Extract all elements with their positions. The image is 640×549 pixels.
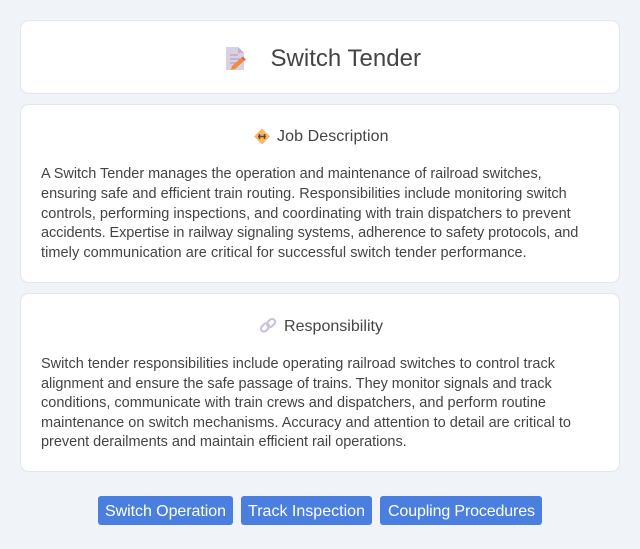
icon: railroad diamond sign xyxy=(254,128,270,144)
text block: job description xyxy=(41,166,578,261)
heading: responsibility: Responsibility xyxy=(284,318,383,335)
text block: responsibility xyxy=(41,356,571,450)
panel: responsibility xyxy=(20,294,620,472)
skill tag: switch operation: Switch Operation xyxy=(105,503,226,520)
text block: job description: A Switch Tender manages the operation and maintenance of railroad switches, xyxy=(41,166,542,182)
title: Switch Tender xyxy=(270,45,421,72)
panel: job description xyxy=(20,104,620,282)
skill tag: coupling procedures xyxy=(380,496,542,525)
text block: responsibility: Switch tender responsibilities include operating railroad switches to control track xyxy=(41,356,556,372)
text block: responsibility: conditions, communicate with train crews and dispatchers, and perform routine xyxy=(41,395,546,411)
heading: job description: Job Description xyxy=(277,128,388,145)
panel: title header xyxy=(20,20,620,94)
text block: responsibility: alignment and ensure the safe passage of trains. They monitor signals and track xyxy=(41,376,552,392)
skill tag: coupling procedures: Coupling Procedures xyxy=(388,503,535,520)
skill tag: track inspection xyxy=(241,496,372,525)
text block: job description: timely communication are critical for successful switch tender performance. xyxy=(41,245,527,261)
text block: job description: accidents. Expertise in railway signaling systems, adherence to safety protocols, and xyxy=(41,225,578,241)
icon: chain link xyxy=(260,318,276,333)
text block: responsibility: prevent derailments and maintain efficient rail operations. xyxy=(41,434,407,450)
text block: job description: controls, performing inspections, and coordinating with train dispatchers to prevent xyxy=(41,206,571,222)
skill tag: track inspection: Track Inspection xyxy=(248,503,365,520)
text block: responsibility: maintenance on switch mechanisms. Accuracy and attention to detail are critical to xyxy=(41,415,571,431)
icon: document with pencil xyxy=(226,47,246,70)
text block: job description: ensuring safe and efficient train routing. Responsibilities include monitoring switch xyxy=(41,186,567,202)
skill tag: switch operation xyxy=(98,496,233,525)
